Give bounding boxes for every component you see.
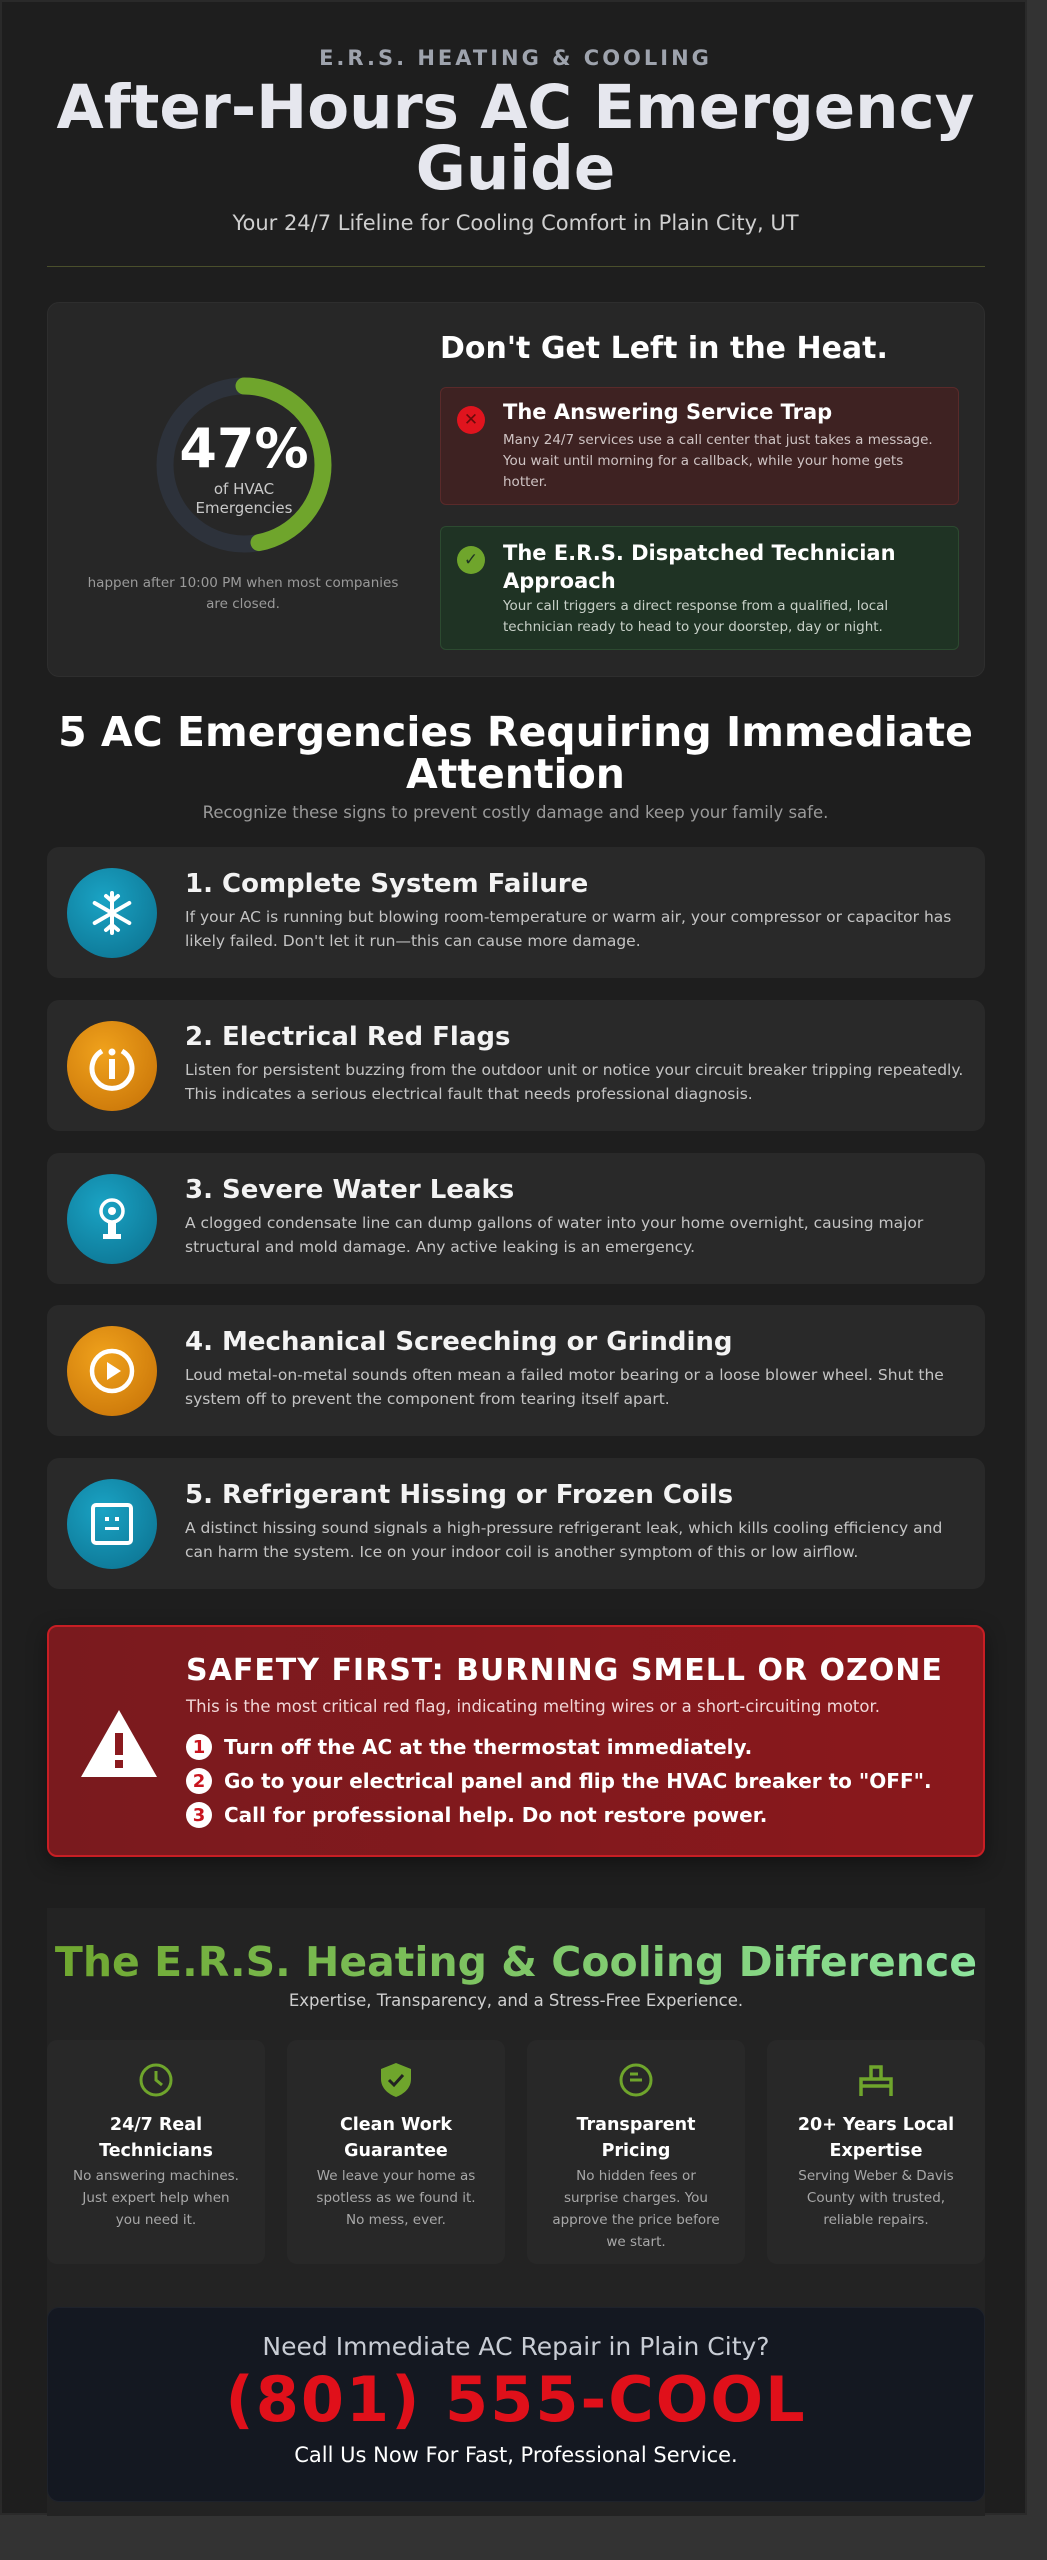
icon: snowflake <box>67 868 157 958</box>
icon: water leak <box>67 1174 157 1264</box>
feature 1: Just expert help when <box>82 2190 230 2206</box>
icon: sound play <box>67 1326 157 1416</box>
card 1: 1. Complete System Failure <box>185 869 588 899</box>
card 2: 2. Electrical Red Flags <box>185 1022 510 1052</box>
section heading: 5 emergencies: 5 AC Emergencies Requiring Immediate <box>58 708 973 756</box>
icon: frozen coil <box>67 1479 157 1569</box>
section: difference <box>47 1908 985 2516</box>
feature 2: spotless as we found it. <box>316 2190 476 2206</box>
safety steps: Turn off the AC at the thermostat immediately. <box>224 1735 752 1759</box>
icon: check <box>457 546 485 574</box>
callout: dispatched technician: The E.R.S. Dispatched Technician Approach <box>503 541 896 593</box>
feature 3: Transparent <box>576 2115 696 2135</box>
icon: x <box>457 406 485 434</box>
card 2: Listen for persistent buzzing from the outdoor unit or notice your circuit breaker tripping repeatedly. This indicates a serious electrical fault that needs professional diagnosis. <box>185 1061 963 1103</box>
feature 3: Pricing <box>602 2141 670 2161</box>
feature 2 <box>287 2040 505 2264</box>
callout: answering service trap: The Answering Service Trap <box>503 400 832 424</box>
donut chart 47%: Emergencies <box>196 499 293 517</box>
feature 3: No hidden fees or <box>576 2168 696 2184</box>
icon: check: ✓ <box>464 550 478 570</box>
feature 3 <box>527 2040 745 2264</box>
donut chart 47%: 47% <box>179 417 309 480</box>
feature 2: No mess, ever. <box>346 2212 446 2228</box>
CTA panel <box>47 2307 985 2502</box>
icon: clock <box>140 2064 172 2096</box>
section subtitle: Recognize these signs to prevent costly damage and keep your family safe. <box>203 803 828 822</box>
donut caption: happen after 10:00 PM when most companies are closed. <box>88 575 398 612</box>
callout: answering service trap <box>440 387 959 505</box>
CTA tagline: Call Us Now For Fast, Professional Service. <box>294 2443 738 2467</box>
feature 1: No answering machines. <box>73 2168 239 2184</box>
subtitle: Your 24/7 Lifeline for Cooling Comfort in Plain City, UT <box>232 211 799 235</box>
card 3: A clogged condensate line can dump gallons of water into your home overnight, causing major structural and mold damage. Any active leaking is an emergency. <box>185 1214 923 1256</box>
feature 3: approve the price before <box>552 2212 720 2228</box>
heading: Don't Get Left in the Heat. <box>440 331 888 366</box>
card 3 <box>47 1153 985 1284</box>
title <box>56 72 974 204</box>
safety steps: 2 <box>193 1770 205 1792</box>
phone number: (801) 555-COOL <box>225 2363 807 2436</box>
icon: electrical <box>67 1021 157 1111</box>
section heading: 5 emergencies <box>58 708 973 798</box>
feature 4: County with trusted, <box>807 2190 945 2206</box>
feature 4: reliable repairs. <box>823 2212 929 2228</box>
feature 1 <box>47 2040 265 2264</box>
card 5: 5. Refrigerant Hissing or Frozen Coils <box>185 1480 733 1510</box>
card 5 <box>47 1458 985 1589</box>
title: After-Hours AC Emergency <box>56 72 974 143</box>
safety steps: Call for professional help. Do not restore power. <box>224 1803 767 1827</box>
safety steps <box>186 1734 932 1828</box>
safety text: This is the most critical red flag, indicating melting wires or a short-circuiting motor. <box>186 1697 880 1716</box>
panel: safety first <box>47 1625 985 1857</box>
feature 4: Serving Weber & Davis <box>798 2168 954 2184</box>
CTA question: Need Immediate AC Repair in Plain City? <box>262 2332 770 2361</box>
icon: warning triangle <box>81 1710 157 1777</box>
icon: pricing <box>620 2064 652 2096</box>
card 5: A distinct hissing sound signals a high-pressure refrigerant leak, which kills cooling efficiency and can harm the system. Ice on your indoor coil is another symptom of this or low airflow. <box>185 1519 942 1561</box>
card 1 <box>47 847 985 978</box>
callout: answering service trap: Many 24/7 services use a call center that just takes a message. You wait until morning for a callback, while your home gets hotter. <box>503 432 933 490</box>
feature 2: We leave your home as <box>317 2168 475 2184</box>
feature 3: surprise charges. You <box>564 2190 708 2206</box>
callout: dispatched technician <box>440 526 959 650</box>
feature 4: 20+ Years Local <box>798 2115 954 2135</box>
safety steps: Go to your electrical panel and flip the HVAC breaker to "OFF". <box>224 1769 932 1793</box>
safety steps: 1 <box>193 1736 205 1758</box>
panel: hero stat <box>47 302 985 677</box>
icon: x: ✕ <box>464 410 478 430</box>
card 4 <box>47 1305 985 1436</box>
callout: dispatched technician: Your call triggers a direct response from a qualified, local technician ready to head to your doorstep, day or night. <box>503 598 888 635</box>
feature 3: we start. <box>606 2234 666 2250</box>
card 3: 3. Severe Water Leaks <box>185 1175 514 1205</box>
safety steps: 3 <box>193 1804 205 1826</box>
donut chart 47% <box>156 378 332 552</box>
card 4: 4. Mechanical Screeching or Grinding <box>185 1327 733 1357</box>
feature 1: Technicians <box>99 2141 213 2161</box>
icon: tools <box>859 2065 893 2096</box>
feature 1: 24/7 Real <box>110 2115 202 2135</box>
feature 1: you need it. <box>116 2212 196 2228</box>
difference heading: The E.R.S. Heating & Cooling Difference <box>55 1938 977 1986</box>
feature 2: Clean Work <box>340 2115 452 2135</box>
icon: shield <box>381 2063 411 2097</box>
difference subtitle: Expertise, Transparency, and a Stress-Free Experience. <box>289 1991 743 2010</box>
donut chart 47%: of HVAC <box>214 480 274 498</box>
section heading: 5 emergencies: Attention <box>406 750 625 798</box>
feature 2: Guarantee <box>344 2141 448 2161</box>
brand label: E.R.S. HEATING & COOLING <box>319 46 712 70</box>
title: Guide <box>416 133 615 204</box>
card 4: Loud metal-on-metal sounds often mean a failed motor bearing or a loose blower wheel. Shut the system off to prevent the component from tearing itself apart. <box>185 1366 944 1408</box>
card 2 <box>47 1000 985 1131</box>
feature 4 <box>767 2040 985 2264</box>
feature 4: Expertise <box>830 2141 922 2161</box>
card 1: If your AC is running but blowing room-temperature or warm air, your compressor or capacitor has likely failed. Don't let it run—this can cause more damage. <box>185 908 951 950</box>
safety heading: SAFETY FIRST: BURNING SMELL OR OZONE <box>186 1653 943 1688</box>
